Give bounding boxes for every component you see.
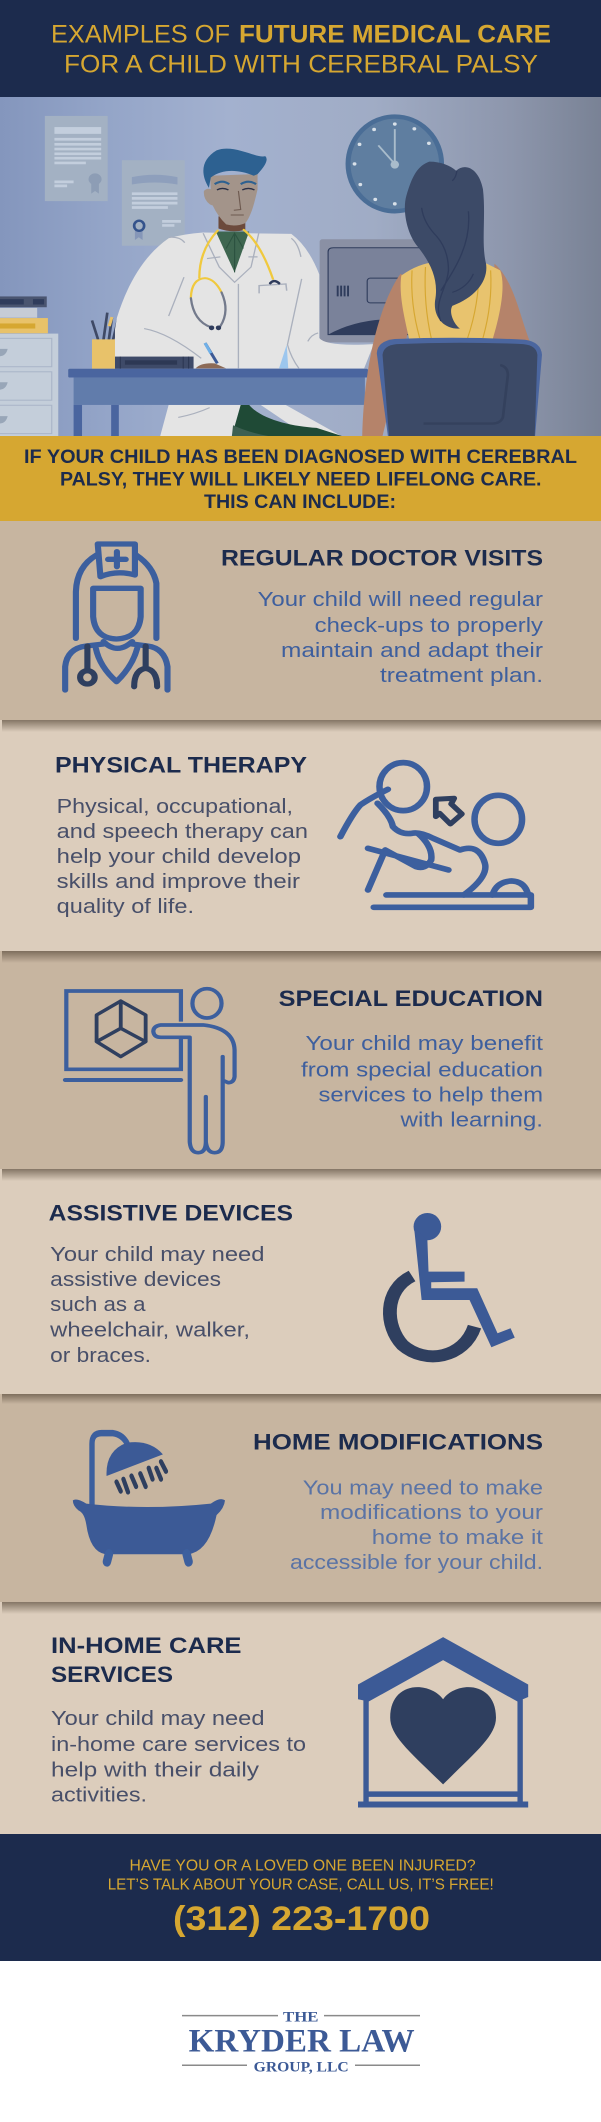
panel: in-home care services [0, 1602, 601, 1834]
panel: home modifications [0, 1394, 601, 1602]
title [51, 21, 551, 79]
heading: IN-HOME CARE [51, 1633, 242, 1658]
intro text: IF YOUR CHILD HAS BEEN DIAGNOSED WITH CEREBRAL [24, 447, 577, 468]
patient chair [377, 338, 542, 436]
panel: special education [0, 951, 601, 1169]
body text [49, 1243, 265, 1367]
body text: quality of life. [57, 895, 194, 918]
intro band [0, 436, 601, 521]
call to action text [108, 1858, 494, 1893]
body text: Your child may need [51, 1707, 264, 1730]
call to action footer [0, 1834, 601, 1961]
title: EXAMPLES OF [51, 21, 230, 49]
desk [68, 357, 368, 436]
body text [51, 1707, 306, 1806]
body text: assistive devices [50, 1268, 221, 1291]
body text: and speech therapy can [57, 820, 308, 843]
intro text: THIS CAN INCLUDE: [204, 492, 396, 513]
body text: help with their daily [51, 1759, 260, 1782]
heading: REGULAR DOCTOR VISITS [221, 545, 543, 570]
heading: PHYSICAL THERAPY [55, 753, 307, 778]
body text [57, 795, 308, 918]
body text: help your child develop [57, 845, 301, 868]
call to action text: LET’S TALK ABOUT YOUR CASE, CALL US, IT’S FREE! [108, 1876, 494, 1893]
body text [301, 1032, 543, 1132]
certificate right [122, 160, 185, 246]
body text: Your child may need [50, 1243, 265, 1266]
body text: skills and improve their [57, 870, 300, 893]
stethoscope [191, 230, 279, 330]
header banner [0, 0, 601, 97]
logo: The Kryder Law Group, LLC [182, 2010, 420, 2075]
icon: wheelchair [390, 1213, 515, 1356]
panel: regular doctor visits [0, 521, 601, 720]
doctor [115, 149, 374, 436]
intro text: PALSY, THEY WILL LIKELY NEED LIFELONG CARE. [60, 470, 542, 490]
title: FOR A CHILD WITH CEREBRAL PALSY [64, 51, 538, 79]
body text: You may need to make [303, 1476, 543, 1499]
pen cup [92, 313, 118, 369]
body text: modifications to your [320, 1501, 543, 1524]
body text [290, 1476, 543, 1574]
body text: Your child may benefit [306, 1032, 543, 1055]
icon: house with heart [358, 1637, 528, 1807]
body text: such as a [50, 1293, 146, 1316]
body text: treatment plan. [380, 664, 543, 687]
body text: check-ups to properly [315, 614, 544, 637]
body text: from special education [301, 1059, 543, 1082]
body text: maintain and adapt their [281, 639, 543, 662]
patient [362, 162, 542, 436]
logo: The Kryder Law Group, LLC: GROUP, LLC [254, 2059, 349, 2075]
filing cabinet and books [0, 296, 58, 436]
call to action text: HAVE YOU OR A LOVED ONE BEEN INJURED? [130, 1858, 476, 1874]
heading: ASSISTIVE DEVICES [49, 1201, 293, 1226]
body text: accessible for your child. [290, 1551, 543, 1574]
icon: physical therapy [340, 763, 531, 907]
icon: bathtub with shower [73, 1433, 225, 1562]
icon: nurse [65, 544, 168, 690]
title: FUTURE MEDICAL CARE [239, 21, 551, 49]
body text: with learning. [399, 1109, 543, 1132]
body text: Physical, occupational, [57, 795, 293, 818]
body text: activities. [51, 1784, 147, 1806]
body text: home to make it [372, 1526, 543, 1549]
body text [258, 588, 544, 687]
certificate left [45, 116, 108, 201]
patient hair [405, 162, 486, 329]
illustration: doctor consulting a patient [0, 97, 601, 436]
phone number: (312) 223-1700 [173, 1900, 430, 1938]
body text: services to help them [318, 1084, 543, 1107]
heading [51, 1633, 242, 1687]
wall clock [348, 117, 442, 211]
panel: physical therapy [0, 720, 601, 951]
heading: SPECIAL EDUCATION [279, 986, 543, 1011]
body text: or braces. [50, 1344, 151, 1367]
body text: Your child will need regular [258, 588, 543, 611]
heading: SERVICES [51, 1662, 173, 1687]
logo: The Kryder Law Group, LLC: KRYDER LAW [189, 2024, 415, 2060]
body text: in-home care services to [51, 1733, 306, 1756]
monitor [320, 239, 435, 342]
intro text [24, 447, 577, 513]
heading: HOME MODIFICATIONS [253, 1430, 543, 1455]
icon: teacher at board [65, 989, 235, 1153]
logo: The Kryder Law Group, LLC: THE [283, 2010, 318, 2026]
body text: wheelchair, walker, [49, 1319, 250, 1342]
panel: assistive devices [0, 1169, 601, 1394]
